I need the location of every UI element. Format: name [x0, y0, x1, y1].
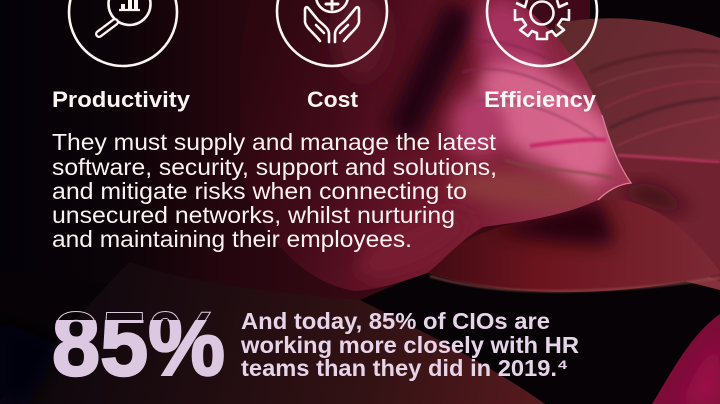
left lower leaf — [0, 262, 545, 404]
right leaf veins — [590, 51, 720, 146]
lower right leaf — [596, 158, 720, 282]
stat description: working more closely with HR — [240, 332, 579, 358]
stat description — [240, 308, 579, 381]
stat description: 4 — [558, 358, 567, 372]
icon: cost hands holding plus coin in circle — [277, 0, 387, 66]
body text block: and mitigate risks when connecting to — [52, 178, 467, 204]
heading: Efficiency: Efficiency — [484, 87, 597, 112]
bottom right pink leaf — [652, 314, 720, 404]
icon: productivity magnifier in circle — [69, 0, 177, 66]
icon: efficiency gear in circle — [487, 0, 597, 66]
bottom dark red leaf — [420, 200, 720, 292]
dark crease — [400, 8, 462, 135]
body text block: They must supply and manage the latest — [52, 129, 496, 155]
central pink leaf — [240, 0, 640, 300]
heading: Cost: Cost — [307, 87, 359, 112]
body text block: and maintaining their employees. — [52, 226, 412, 252]
big stat: 85%: 85% — [52, 294, 225, 395]
right brown leaf — [555, 18, 720, 290]
stat description: And today, 85% of CIOs are — [241, 308, 550, 334]
body text block: software, security, support and solutions, — [52, 154, 497, 180]
pink highlights — [464, 0, 552, 76]
body text block: unsecured networks, whilst nurturing — [52, 202, 455, 228]
dark left leaf — [0, 0, 590, 300]
big stat: 85% — [54, 311, 224, 378]
body text block — [52, 129, 497, 252]
stat description: teams than they did in 2019. — [241, 355, 557, 381]
big stat: 85%: 85% — [52, 294, 225, 395]
pink leaf veins — [460, 41, 612, 178]
heading: Productivity: Productivity — [52, 87, 191, 112]
